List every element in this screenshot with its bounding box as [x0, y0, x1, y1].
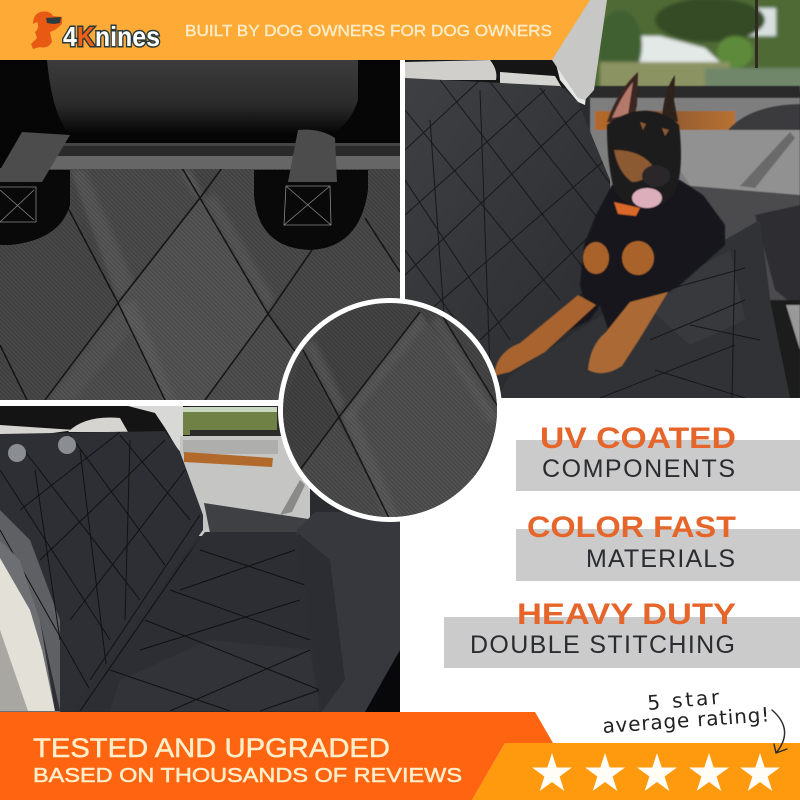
window post [755, 0, 758, 68]
photo: close-up of seat cover straps [0, 60, 400, 400]
left reinforced patch and strap [0, 132, 70, 245]
dark cabin top [0, 406, 190, 438]
body [560, 180, 725, 335]
doberman [494, 72, 725, 376]
footer orange banner: BASED ON THOUSANDS OF REVIEWS [33, 765, 462, 787]
right ear [662, 75, 678, 122]
window [183, 407, 277, 436]
tan eyebrows [640, 122, 669, 136]
car window with trees [590, 0, 800, 92]
feature: UV coated components [516, 422, 800, 491]
footer orange banner [0, 712, 553, 800]
feature: UV coated components: COMPONENTS [542, 455, 735, 483]
door and trim [590, 86, 800, 398]
feature: heavy duty double stitching: DOUBLE STITCHING [470, 631, 735, 659]
feature: color fast materials: MATERIALS [586, 545, 735, 573]
rating panel with five stars [472, 743, 800, 800]
left front leg [494, 295, 596, 376]
right front leg [588, 292, 668, 373]
tagline: BUILT BY DOG OWNERS FOR DOG OWNERS [185, 23, 552, 40]
left ear [607, 72, 638, 122]
photo: doberman on quilted seat cover [405, 0, 800, 405]
header banner [0, 0, 590, 60]
white divider ring and fabric close-up circle [278, 298, 502, 522]
head [607, 111, 681, 210]
hammock side [297, 512, 400, 712]
feature: UV coated components: UV COATED [540, 422, 736, 455]
feature: heavy duty double stitching: HEAVY DUTY [517, 598, 736, 631]
orange collar bow [614, 202, 640, 216]
arrow to stars [772, 710, 787, 753]
chest tan patches [583, 242, 609, 274]
right reinforced patch and strap [254, 130, 368, 250]
headrests [0, 418, 128, 434]
tan muzzle [614, 150, 652, 182]
feature: color fast materials: COLOR FAST [527, 511, 736, 544]
tongue [632, 188, 662, 208]
back of car and headrests [405, 0, 607, 105]
footer orange banner: TESTED AND UPGRADED [33, 733, 390, 763]
logo wordmark: 4Knines [63, 21, 160, 52]
icon: 4Knines dog mascot [31, 12, 62, 49]
door panel [180, 436, 315, 536]
top hem band [50, 143, 400, 169]
left door frame [0, 540, 60, 712]
feature: color fast materials [516, 511, 800, 581]
quilted backrest [405, 78, 610, 360]
headrest [47, 60, 358, 128]
photo: rear seat with hammock cover [0, 406, 400, 715]
feature: heavy duty double stitching [444, 598, 800, 668]
handwritten note: 5 star: 5 star [646, 685, 721, 715]
quilted backrest [0, 430, 210, 715]
quilted seat bottom [70, 530, 325, 715]
icon: mascot sunglasses [46, 17, 61, 24]
handwritten note: average rating: average rating! [602, 702, 770, 738]
quilted seat bottom [600, 222, 790, 398]
